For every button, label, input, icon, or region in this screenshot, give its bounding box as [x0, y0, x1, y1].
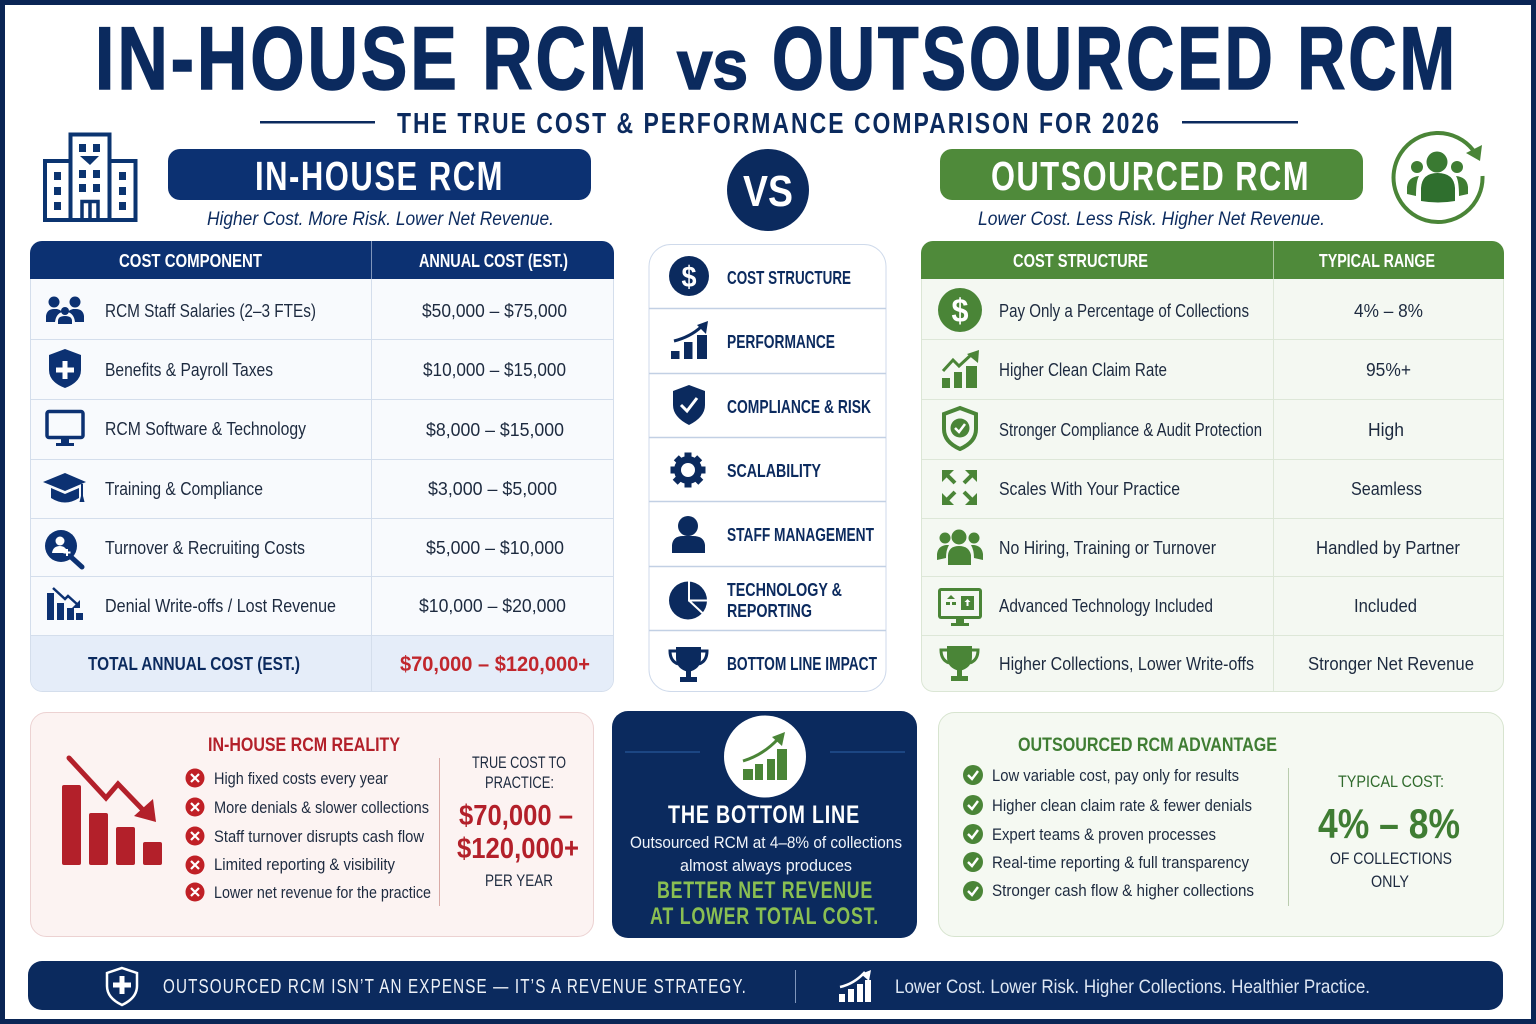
icon: green dollar: $	[952, 292, 968, 329]
list: outsourced advantages: Higher clean claim rate & fewer denials	[992, 797, 1252, 815]
callout: true cost: PRACTICE:	[485, 773, 554, 792]
text: footer tagline: Lower Cost. Lower Risk. Higher Collections. Healthier Practice.	[895, 976, 1370, 998]
label: bottom line impact: BOTTOM LINE IMPACT	[727, 654, 877, 674]
callout: true cost: $120,000+	[457, 833, 579, 865]
tagline: outsourced: Lower Cost. Less Risk. Higher Net Revenue.	[978, 208, 1325, 230]
icon: hospital building	[45, 134, 136, 220]
text: bottom line highlight	[650, 877, 879, 930]
row: scales	[999, 478, 1422, 499]
list: outsourced advantages: Expert teams & proven processes	[992, 826, 1216, 844]
row: clean claim rate: Higher Clean Claim Rate	[999, 359, 1167, 380]
row: no hiring: No Hiring, Training or Turnover	[999, 537, 1216, 558]
icon: declining bars	[47, 588, 83, 620]
callout: typical cost	[1318, 772, 1460, 891]
icon: performance chart	[671, 321, 708, 359]
panel: outsourced advantage	[938, 712, 1504, 936]
text: bottom line highlight: AT LOWER TOTAL COST.	[650, 903, 879, 930]
row: software	[105, 418, 564, 440]
icon: magnifier person	[45, 530, 82, 567]
icon: pie chart	[669, 580, 708, 620]
icon: dollar: $	[682, 261, 697, 294]
row: pay percentage: 4% – 8%	[1354, 300, 1423, 321]
list: in-house problems: Limited reporting & visibility	[214, 856, 396, 874]
list: outsourced advantages: Stronger cash flow & higher collections	[992, 882, 1254, 900]
panel: comparison categories	[649, 244, 886, 692]
text: bottom line description: almost always produces	[680, 856, 852, 875]
table header: outsourced: COST STRUCTURE	[1013, 251, 1148, 271]
table header: in-house: ANNUAL COST (EST.)	[419, 251, 568, 271]
list: in-house problems	[186, 768, 431, 902]
label: cost structure: COST STRUCTURE	[727, 268, 851, 288]
row: turnover	[105, 537, 564, 558]
panel: in-house cost table	[30, 241, 614, 692]
heading: in-house reality: IN-HOUSE RCM REALITY	[208, 735, 400, 756]
row: scales: Seamless	[1351, 478, 1422, 499]
table header: in-house: COST COMPONENT	[119, 251, 262, 271]
heading: outsourced advantage: OUTSOURCED RCM ADVANTAGE	[1018, 735, 1277, 756]
row: training: $3,000 – $5,000	[428, 478, 557, 499]
row: higher collections	[999, 653, 1474, 674]
label: scalability: SCALABILITY	[727, 461, 821, 481]
row: clean claim rate: 95%+	[1366, 359, 1411, 380]
row: pay percentage: Pay Only a Percentage of Collections	[999, 300, 1249, 321]
label: technology and reporting: REPORTING	[727, 601, 812, 621]
panel: in-house reality	[30, 712, 594, 936]
icon: dollar	[669, 256, 709, 296]
table header: in-house	[119, 251, 568, 271]
subtitle: THE TRUE COST & PERFORMANCE COMPARISON FOR 2026	[397, 108, 1161, 140]
icon: graduation cap	[43, 473, 86, 502]
row: benefits: Benefits & Payroll Taxes	[105, 359, 273, 380]
row: software: RCM Software & Technology	[105, 418, 307, 439]
icon: green team	[937, 530, 983, 565]
row: training: Training & Compliance	[105, 478, 263, 499]
list: outsourced advantages: Low variable cost, pay only for results	[992, 767, 1239, 785]
row: turnover: Turnover & Recruiting Costs	[105, 537, 305, 558]
row: benefits: $10,000 – $15,000	[423, 359, 566, 380]
row: higher collections: Higher Collections, Lower Write-offs	[999, 653, 1254, 674]
title: IN-HOUSE RCM	[95, 8, 650, 108]
icon: footer shield	[107, 968, 137, 1005]
row: benefits	[105, 359, 566, 380]
panel: the bottom line	[612, 711, 917, 938]
row: compliance protection: Stronger Compliance & Audit Protection	[999, 419, 1262, 440]
heading: the bottom line: THE BOTTOM LINE	[668, 801, 860, 829]
row: total annual cost: TOTAL ANNUAL COST (EST.)	[88, 654, 300, 674]
row: scales: Scales With Your Practice	[999, 478, 1180, 499]
row: denial write-offs: Denial Write-offs / Lost Revenue	[105, 595, 336, 616]
row: staff salaries: RCM Staff Salaries (2–3 FTEs)	[105, 300, 316, 321]
callout: true cost: $70,000 –	[459, 800, 573, 832]
title: vs	[677, 26, 748, 104]
label: staff management: STAFF MANAGEMENT	[727, 525, 874, 545]
label: technology and reporting: TECHNOLOGY &	[727, 580, 842, 600]
callout: true cost	[457, 753, 579, 890]
icon: team in circular arrow	[1394, 133, 1483, 222]
row: clean claim rate	[999, 359, 1411, 380]
badge: VS: VS	[743, 167, 793, 216]
row: staff salaries: $50,000 – $75,000	[422, 300, 567, 321]
banner: outsourced: OUTSOURCED RCM	[991, 153, 1310, 199]
icon: footer chart	[839, 970, 871, 1002]
icon: gear	[670, 452, 706, 488]
row: training	[105, 478, 557, 499]
row: turnover: $5,000 – $10,000	[426, 537, 564, 558]
row: advanced technology: Included	[1354, 595, 1417, 616]
table header: outsourced: TYPICAL RANGE	[1319, 251, 1435, 271]
icon: expand arrows	[942, 470, 977, 505]
icon: green monitor dashboard	[938, 588, 982, 626]
row: total annual cost: $70,000 – $120,000+	[400, 653, 590, 676]
panel: outsourced structure table	[921, 241, 1504, 692]
row: compliance protection: High	[1368, 419, 1404, 440]
callout: typical cost: TYPICAL COST:	[1338, 772, 1444, 791]
icon: shield check	[673, 385, 705, 425]
list: in-house problems: High fixed costs every year	[214, 770, 388, 788]
list: outsourced advantages	[963, 765, 1254, 901]
icon: green trophy	[941, 646, 978, 681]
callout: true cost: PER YEAR	[485, 871, 553, 890]
row: higher collections: Stronger Net Revenue	[1308, 653, 1474, 674]
text: bottom line description	[630, 833, 902, 875]
text: bottom line highlight: BETTER NET REVENUE	[657, 877, 873, 904]
badge: VS	[727, 149, 809, 231]
row: advanced technology: Advanced Technology Included	[999, 595, 1213, 616]
row: denial write-offs	[105, 595, 566, 616]
row: staff salaries	[105, 300, 567, 321]
icon: trophy	[670, 647, 707, 682]
label: compliance and risk: COMPLIANCE & RISK	[727, 397, 871, 417]
list: in-house problems: Lower net revenue for the practice	[214, 884, 431, 902]
footer banner	[28, 961, 1503, 1010]
row: software: $8,000 – $15,000	[426, 419, 564, 440]
row: no hiring: Handled by Partner	[1316, 537, 1460, 558]
text: footer statement: OUTSOURCED RCM ISN’T AN EXPENSE — IT’S A REVENUE STRATEGY.	[163, 976, 747, 998]
label: performance: PERFORMANCE	[727, 332, 835, 352]
icon: monitor	[47, 412, 83, 446]
row: no hiring	[999, 537, 1460, 558]
callout: typical cost: OF COLLECTIONS	[1330, 849, 1452, 868]
icon: staff people	[46, 296, 84, 324]
callout: typical cost: 4% – 8%	[1318, 800, 1460, 847]
row: advanced technology	[999, 595, 1417, 616]
callout: true cost: TRUE COST TO	[472, 753, 566, 772]
row: total annual cost	[88, 653, 590, 676]
icon: green growth chart	[942, 350, 979, 388]
tagline: in-house: Higher Cost. More Risk. Lower Net Revenue.	[207, 208, 554, 230]
list: in-house problems: More denials & slower collections	[214, 799, 429, 817]
title	[95, 8, 1458, 108]
list: in-house problems: Staff turnover disrupts cash flow	[214, 828, 424, 846]
banner: in-house: IN-HOUSE RCM	[255, 153, 504, 199]
table header: outsourced	[1013, 251, 1435, 271]
icon: green shield check	[944, 408, 976, 449]
icon: shield plus	[49, 349, 81, 388]
text: bottom line description: Outsourced RCM at 4–8% of collections	[630, 833, 902, 852]
label: technology and reporting	[727, 580, 842, 621]
chart: declining bars with arrow	[62, 758, 162, 865]
icon: person	[672, 516, 705, 553]
icon: growth bars	[743, 732, 787, 780]
row: denial write-offs: $10,000 – $20,000	[419, 595, 566, 616]
list: outsourced advantages: Real-time reporting & full transparency	[992, 854, 1250, 872]
callout: typical cost: ONLY	[1371, 872, 1409, 891]
icon: green dollar	[938, 288, 982, 332]
